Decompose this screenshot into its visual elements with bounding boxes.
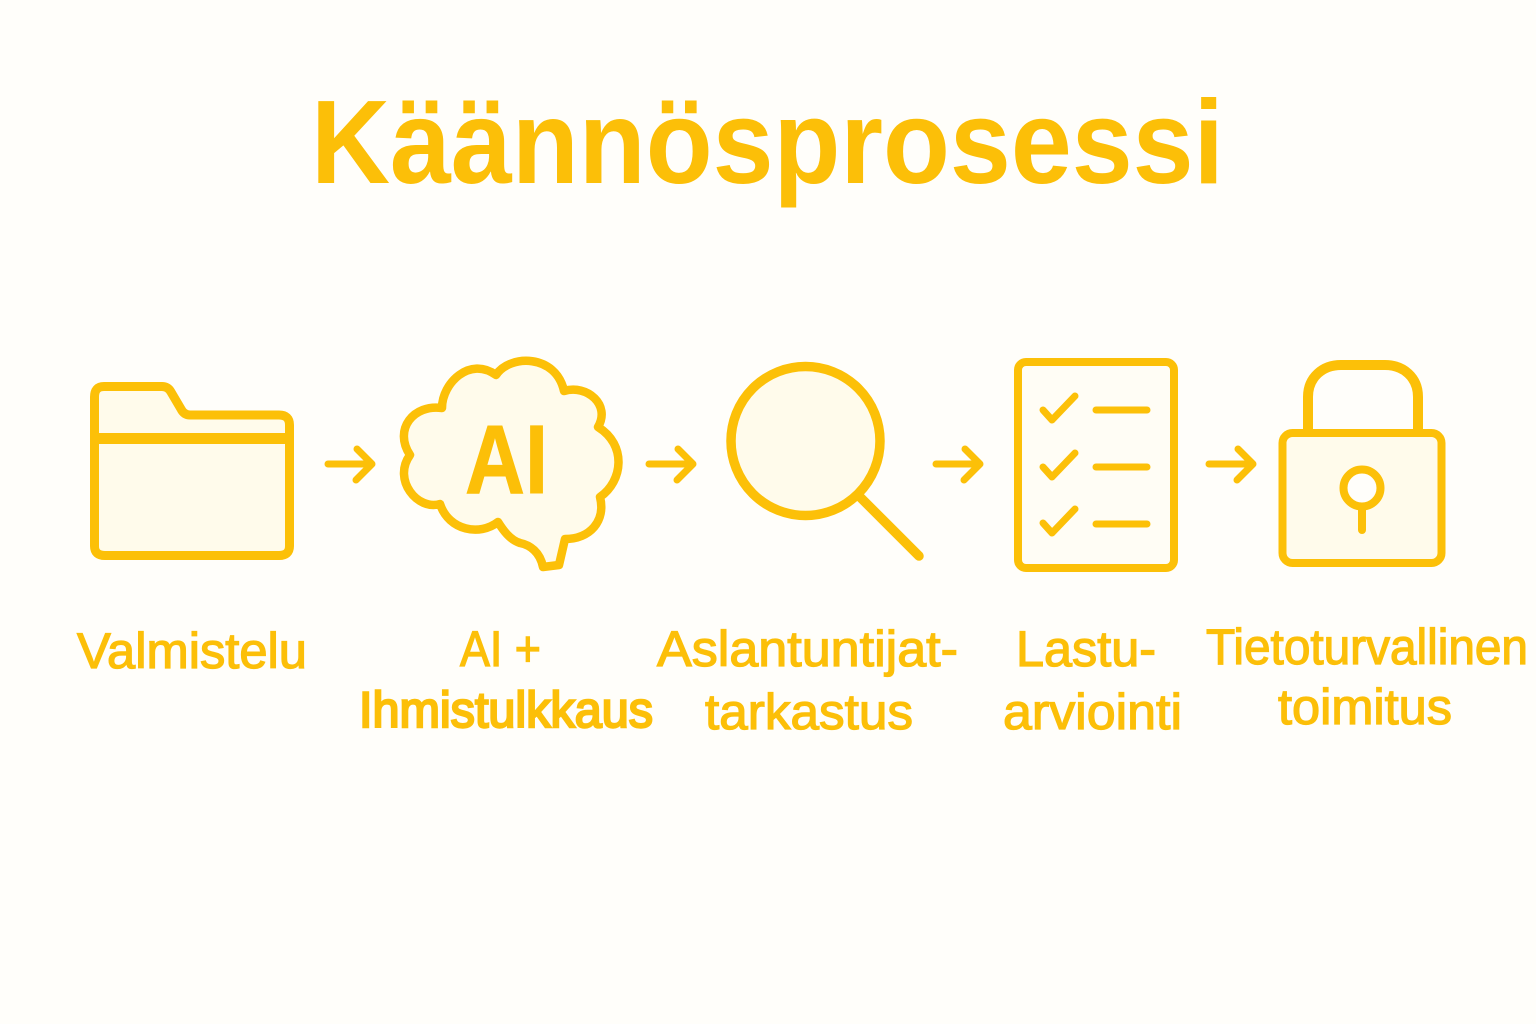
AI letters: AI	[465, 405, 548, 514]
label: Aslantuntijat-tarkastus	[657, 621, 958, 740]
icon: magnifying glass	[731, 366, 919, 556]
icon: checklist	[1018, 362, 1174, 568]
icon: AI brain cloud	[404, 361, 619, 567]
label: Lastu-arviointi: arviointi	[1003, 684, 1182, 740]
label: Lastu-arviointi	[1003, 621, 1182, 740]
label: AI + Ihmistulkkaus: AI +	[460, 621, 541, 677]
arrow: step 4 to 5	[1209, 449, 1253, 480]
label: Lastu-arviointi: Lastu-	[1016, 621, 1156, 677]
label: AI + Ihmistulkkaus: Ihmistulkkaus	[359, 682, 653, 738]
label: AI + Ihmistulkkaus	[359, 621, 653, 738]
icon: folder	[94, 386, 290, 556]
label: Tietoturvallinen toimitus: Tietoturvallinen	[1206, 619, 1528, 675]
label: Valmistelu: Valmistelu	[77, 623, 307, 679]
arrow: step 2 to 3	[649, 449, 693, 480]
arrow: step 1 to 2	[328, 449, 372, 480]
title: Käännösprosessi	[311, 76, 1224, 209]
icon: padlock	[1282, 365, 1442, 563]
label: Tietoturvallinen toimitus	[1206, 619, 1528, 735]
arrow: step 3 to 4	[936, 449, 980, 480]
label: Aslantuntijat-tarkastus: tarkastus	[705, 684, 913, 740]
label: Tietoturvallinen toimitus: toimitus	[1278, 679, 1452, 735]
label: Aslantuntijat-tarkastus: Aslantuntijat-	[657, 621, 958, 677]
